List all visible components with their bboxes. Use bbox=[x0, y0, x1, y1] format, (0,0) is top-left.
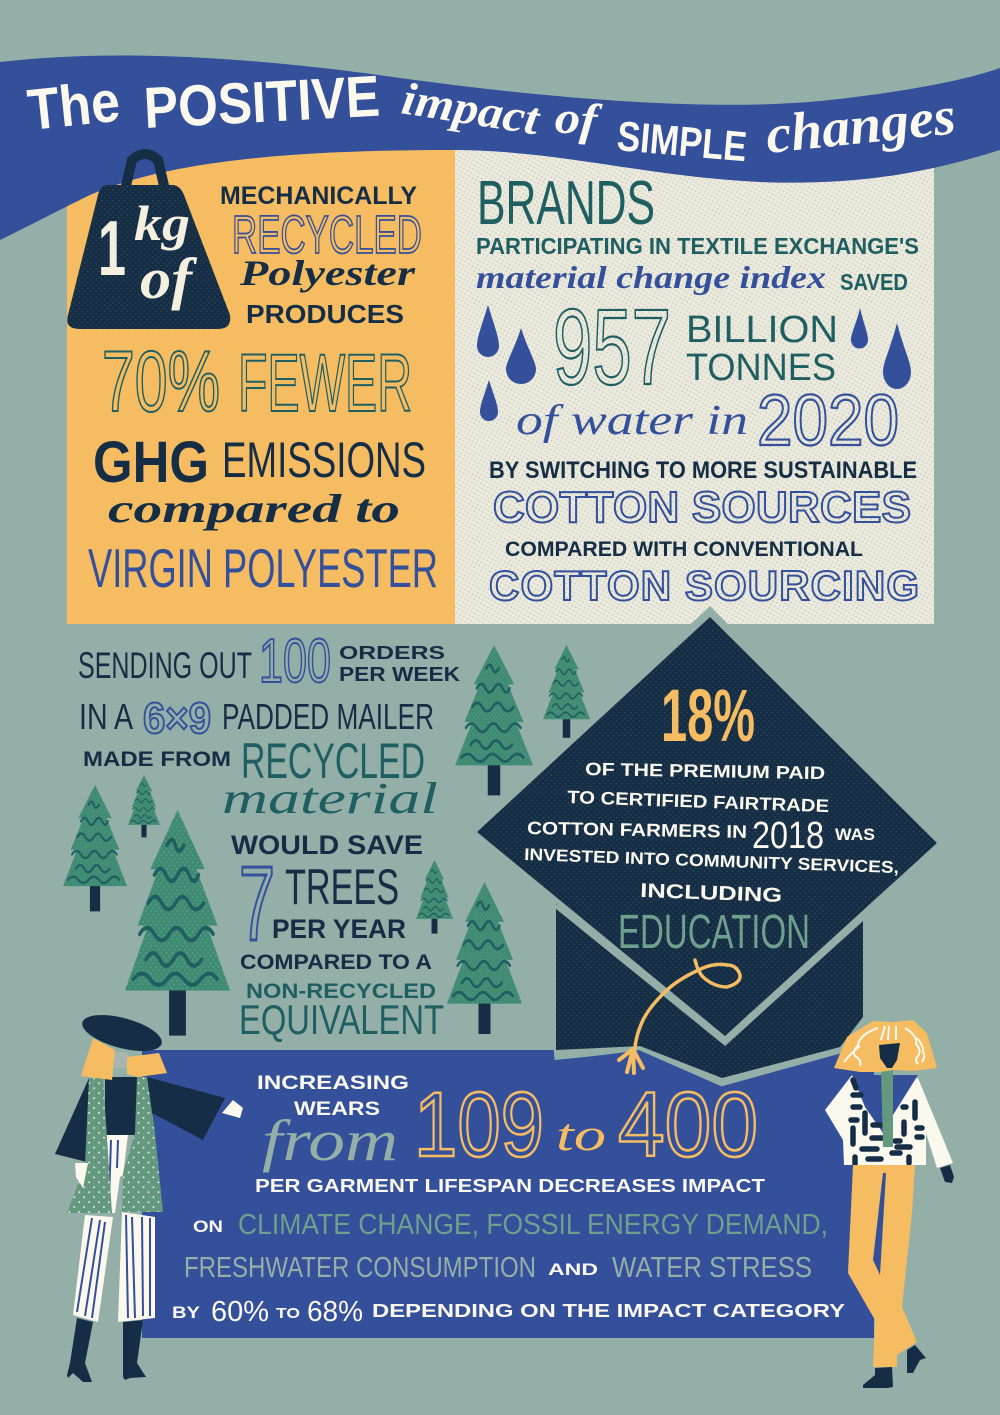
icon: kilogram weight: 1 bbox=[98, 204, 126, 292]
panel: recycled polyester bbox=[67, 130, 456, 624]
text: recycled polyester claim: FEWER bbox=[238, 338, 412, 429]
title: SIMPLE bbox=[615, 112, 749, 170]
text: increasing wears claim: WATER STRESS bbox=[612, 1252, 812, 1284]
text: increasing wears claim: 68% bbox=[307, 1296, 363, 1328]
text: padded mailer claim: ORDERS bbox=[339, 643, 445, 663]
text: brands water claim: BILLION bbox=[686, 309, 838, 351]
title: POSITIVE bbox=[142, 64, 381, 141]
text: fairtrade claim: EDUCATION bbox=[618, 906, 810, 959]
text: padded mailer claim: 100 bbox=[259, 627, 331, 696]
text: increasing wears claim: CLIMATE CHANGE, FOSSIL ENERGY DEMAND, bbox=[238, 1209, 828, 1241]
text: padded mailer claim: PER WEEK bbox=[339, 664, 461, 686]
text: padded mailer claim: 6×9 bbox=[143, 694, 211, 743]
text: brands water claim: COMPARED WITH CONVENTIONAL bbox=[505, 538, 863, 561]
title bbox=[25, 64, 958, 170]
text: fairtrade claim: 18% bbox=[661, 674, 755, 757]
text: padded mailer claim: IN A bbox=[79, 696, 133, 737]
icon: water drops bbox=[477, 305, 911, 421]
text: brands water claim: TONNES bbox=[686, 347, 836, 389]
text: recycled polyester claim bbox=[88, 182, 438, 599]
text: increasing wears claim: INCREASING bbox=[257, 1073, 409, 1094]
title banner bbox=[0, 55, 1000, 240]
icon: kilogram weight: of bbox=[140, 246, 198, 311]
text: padded mailer claim: PER YEAR bbox=[272, 914, 406, 944]
title: changes bbox=[763, 85, 958, 165]
text: brands water claim: BRANDS bbox=[477, 169, 655, 238]
text: recycled polyester claim: GHG bbox=[93, 430, 209, 495]
text: brands water claim: BY SWITCHING TO MORE SUSTAINABLE bbox=[489, 457, 917, 484]
text: increasing wears claim: from bbox=[262, 1108, 398, 1173]
text: recycled polyester claim: compared to bbox=[108, 486, 400, 531]
text: brands water claim: SAVED bbox=[840, 269, 908, 295]
text: padded mailer claim: material bbox=[222, 774, 438, 823]
text: padded mailer claim: NON-RECYCLED bbox=[246, 980, 436, 1003]
text: increasing wears claim: 60% bbox=[211, 1296, 269, 1328]
text: increasing wears claim: FRESHWATER CONSUMPTION bbox=[184, 1252, 536, 1284]
text: increasing wears claim: 400 bbox=[618, 1074, 758, 1176]
text: recycled polyester claim: VIRGIN POLYESTER bbox=[88, 537, 438, 599]
text: padded mailer claim: TREES bbox=[285, 859, 399, 915]
figure: woman on the right bbox=[825, 1020, 954, 1388]
text: fairtrade claim: COTTON FARMERS IN bbox=[527, 818, 747, 842]
figure: woman on the left bbox=[55, 1008, 243, 1382]
text: padded mailer claim bbox=[78, 627, 461, 1043]
text: recycled polyester claim: PRODUCES bbox=[246, 299, 404, 329]
text: fairtrade claim: WAS bbox=[835, 825, 875, 844]
text: fairtrade claim: INVESTED INTO COMMUNITY SERVICES, bbox=[524, 845, 899, 877]
title: of bbox=[553, 91, 605, 146]
icon: kilogram weight: kg bbox=[134, 195, 190, 251]
text: brands water claim: of water in bbox=[516, 398, 748, 444]
text: padded mailer claim: SENDING OUT bbox=[78, 645, 252, 686]
text: increasing wears claim: PER GARMENT LIFESPAN DECREASES IMPACT bbox=[255, 1176, 765, 1196]
text: brands water claim: 2020 bbox=[757, 381, 899, 461]
text: increasing wears claim: WEARS bbox=[294, 1099, 380, 1120]
text: fairtrade claim: OF THE PREMIUM PAID bbox=[585, 759, 825, 783]
text: increasing wears claim: 109 bbox=[414, 1074, 544, 1176]
text: padded mailer claim: PADDED MAILER bbox=[222, 696, 434, 737]
text: recycled polyester claim: MECHANICALLY bbox=[220, 182, 417, 210]
text: increasing wears claim: ON bbox=[193, 1217, 223, 1236]
text: fairtrade claim: 2018 bbox=[752, 815, 824, 857]
text: padded mailer claim: RECYCLED bbox=[241, 733, 425, 789]
text: brands water claim: COTTON SOURCES bbox=[493, 483, 911, 532]
text: padded mailer claim: 7 bbox=[239, 845, 275, 963]
text: increasing wears claim bbox=[172, 1073, 845, 1328]
text: padded mailer claim: COMPARED TO A bbox=[240, 951, 432, 974]
text: increasing wears claim: AND bbox=[548, 1260, 598, 1279]
text: brands water claim: COTTON SOURCING bbox=[489, 562, 919, 609]
text: brands water claim: PARTICIPATING IN TEXTILE EXCHANGE'S bbox=[476, 233, 919, 259]
text: fairtrade claim: INCLUDING bbox=[640, 880, 783, 907]
text: recycled polyester claim: EMISSIONS bbox=[222, 432, 426, 488]
text: brands water claim bbox=[476, 169, 919, 609]
text: padded mailer claim: EQUIVALENT bbox=[239, 996, 444, 1043]
trees bbox=[63, 645, 590, 1036]
panel: brands water saving bbox=[455, 140, 934, 624]
text: padded mailer claim: MADE FROM bbox=[83, 748, 231, 771]
text: increasing wears claim: to bbox=[556, 1109, 606, 1160]
text: recycled polyester claim: RECYCLED bbox=[232, 205, 422, 265]
title: The bbox=[25, 69, 123, 143]
text: increasing wears claim: BY bbox=[172, 1303, 201, 1322]
text: recycled polyester claim: Polyester bbox=[239, 253, 416, 293]
icon: kilogram weight bbox=[67, 154, 230, 329]
text: brands water claim: 957 bbox=[553, 286, 671, 407]
panel: increasing wears bbox=[142, 1050, 874, 1338]
text: recycled polyester claim: 70% bbox=[102, 334, 220, 430]
icon: graduation cap bbox=[470, 606, 945, 1080]
text: fairtrade claim: TO CERTIFIED FAIRTRADE bbox=[567, 787, 829, 816]
text: brands water claim: material change index bbox=[476, 259, 826, 295]
title: impact bbox=[398, 73, 544, 145]
text: increasing wears claim: TO bbox=[276, 1305, 300, 1322]
text: padded mailer claim: WOULD SAVE bbox=[231, 830, 423, 860]
text: increasing wears claim: DEPENDING ON THE IMPACT CATEGORY bbox=[372, 1301, 845, 1321]
text: fairtrade claim bbox=[524, 674, 899, 959]
